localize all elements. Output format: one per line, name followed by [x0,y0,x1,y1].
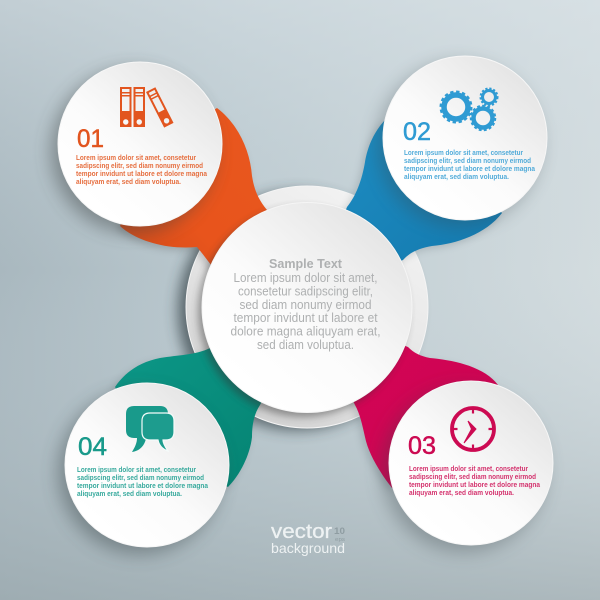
text block 02: sadipscing elitr, sed diam nonumy eirmod [404,156,531,165]
text block 04: sadipscing elitr, sed diam nonumy eirmod [77,473,204,482]
panel: magenta connector [307,310,498,491]
watermark logo: 10 [334,526,345,536]
panel: center disc [198,202,412,417]
watermark logo: background [271,540,345,556]
center text block: dolore magna aliquyam erat, [230,324,380,338]
number 04: 04 [78,433,107,461]
text block 01: Lorem ipsum dolor sit amet, consetetur [76,153,196,162]
text block 04: Lorem ipsum dolor sit amet, consetetur [77,465,196,474]
panel: 01 [51,62,222,233]
text block 01: sadipscing elitr, sed diam nonumy eirmod [76,161,203,170]
text block 03: Lorem ipsum dolor sit amet, consetetur [409,464,528,473]
panel: 04 [58,383,229,554]
text block 01: tempor invidunt ut labore et dolore magna [76,169,208,178]
panel: 03 [382,381,553,552]
center text block [230,270,380,352]
panel: orange connector [117,108,300,303]
text block 03: aliquyam erat, sed diam voluptua. [409,488,514,497]
center text block: Lorem ipsum dolor sit amet, [234,270,378,285]
text block 04: aliquyam erat, sed diam voluptua. [77,489,182,498]
panel: 02 [377,56,547,226]
text block 03: sadipscing elitr, sed diam nonumy eirmod [409,472,536,481]
panel: green connector [112,310,310,490]
center text block: consetetur sadipscing elitr, [238,284,373,298]
number 02: 02 [403,118,431,146]
text block 03 [409,464,541,497]
center ring [178,186,428,430]
icon: speech bubbles [126,406,174,452]
center text block: tempor invidunt ut labore et [234,310,378,325]
center text block: sed diam voluptua. [257,337,354,352]
icon: clock [452,408,494,450]
number 03: 03 [408,432,436,460]
text block 04 [77,465,209,498]
watermark logo: vector [271,521,332,543]
text block 02: aliquyam erat, sed diam voluptua. [404,172,509,181]
center heading: Sample Text [269,256,343,271]
center text block: sed diam nonumy eirmod [240,297,372,312]
panel: blue connector [307,120,502,303]
text block 01: aliquyam erat, sed diam voluptua. [76,177,181,186]
text block 02: Lorem ipsum dolor sit amet, consetetur [404,148,523,157]
text block 03: tempor invidunt ut labore et dolore magna [409,480,541,489]
watermark logo: eps [335,537,346,543]
text block 02: tempor invidunt ut labore et dolore magna [404,164,536,173]
icon: binders [120,87,174,128]
text block 02 [404,148,536,181]
text block 04: tempor invidunt ut labore et dolore magna [77,481,209,490]
number 01: 01 [77,125,104,153]
watermark logo [271,521,346,556]
text block 01 [76,153,208,186]
icon: gears [441,88,498,130]
